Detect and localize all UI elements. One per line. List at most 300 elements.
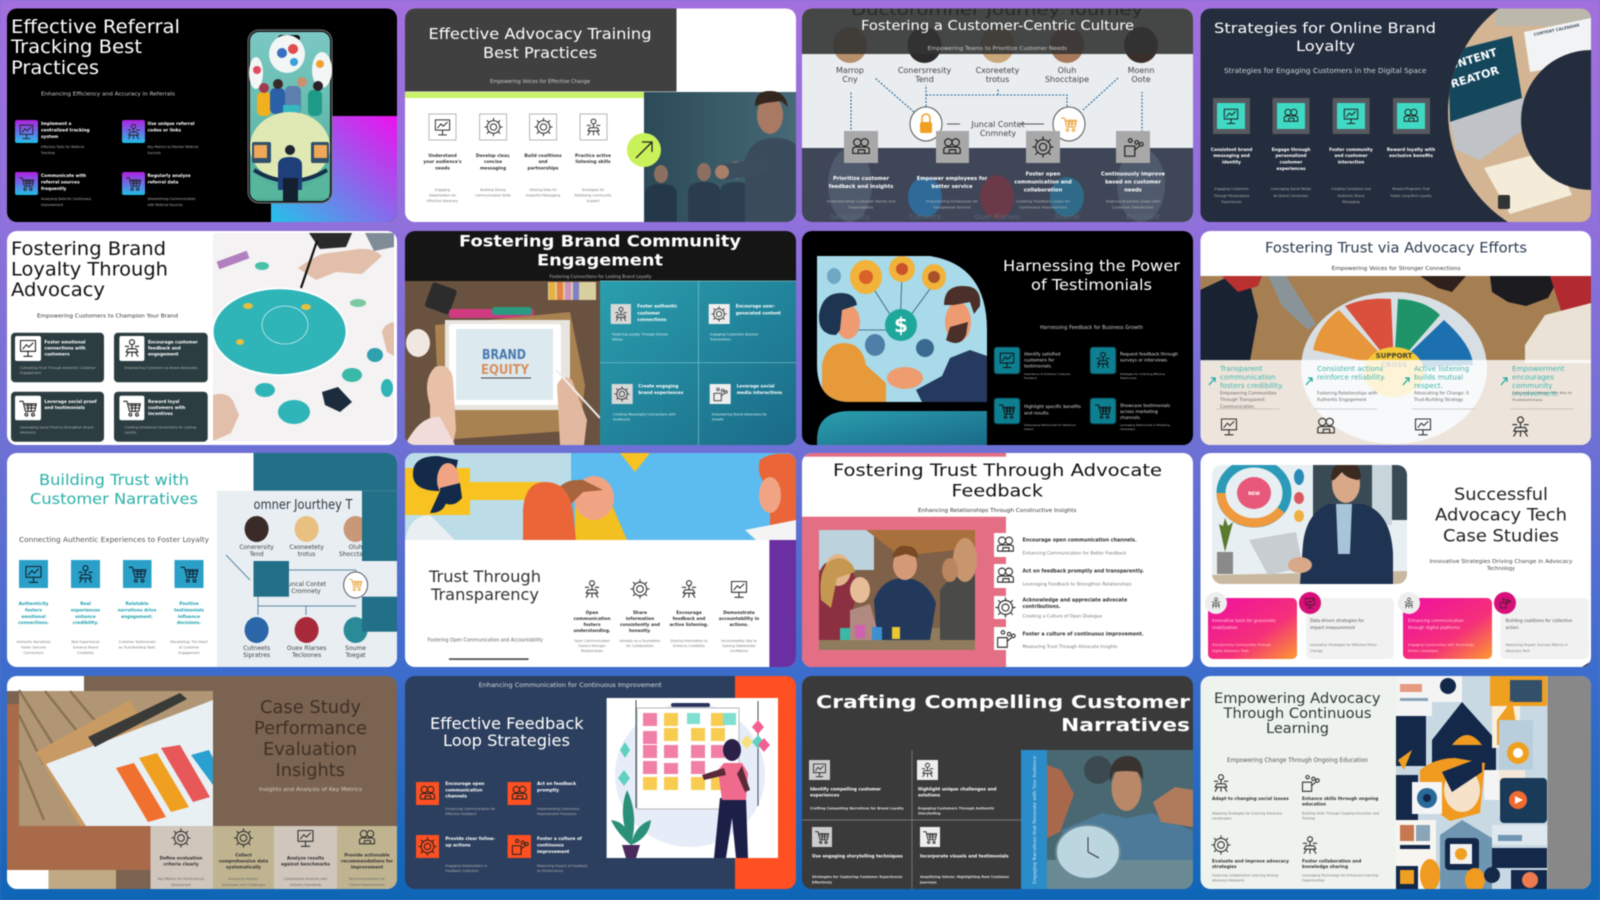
subtitle: Enhancing Efficiency and Accuracy in Referrals xyxy=(41,92,175,98)
orange side bar xyxy=(735,676,796,889)
header band xyxy=(405,8,676,92)
item: showcase testimonials: channels. xyxy=(1120,415,1141,421)
item: act promptly xyxy=(508,781,580,816)
gradient corner block xyxy=(271,116,397,222)
card: impact measurement xyxy=(1299,592,1394,659)
item: understand audience: your audience's xyxy=(423,159,462,165)
item: community interaction: Authentic Brand xyxy=(1338,194,1364,198)
panel: Case Study Performance Evaluation Insights xyxy=(7,676,397,889)
item: consistent messaging: Consistent brand xyxy=(1211,147,1252,153)
card: feedback and engagement: engagement xyxy=(148,352,178,358)
item: customer experiences: Crafting Compelling Narratives for Brand Loyalty xyxy=(810,806,905,810)
item: open channels xyxy=(416,781,496,816)
item: referral codes xyxy=(122,120,199,155)
item: empowerment: Trustworthiness xyxy=(1511,397,1543,402)
item: open channels: communication xyxy=(445,788,482,794)
item: specific benefits: Showcasing Testimonials for Maximum xyxy=(1024,423,1076,427)
panel: Successful Advocacy Tech Case Studies xyxy=(1200,453,1591,667)
item: analyze referral data: referral data xyxy=(148,180,178,186)
subtitle: Technology xyxy=(1486,566,1515,572)
item: understand audience xyxy=(423,114,462,203)
item: reward loyalty: Reward loyalty with xyxy=(1387,147,1435,153)
item: ongoing education: Building Skills Through Ongoing Education and xyxy=(1302,812,1379,816)
diagram fragment background: Cromnety xyxy=(291,588,321,595)
card: emotional connections: connections with xyxy=(44,346,86,352)
item: social issues xyxy=(1212,775,1289,820)
item: act promptly: Act on feedback xyxy=(537,781,576,787)
card: grassroots tools: mobilization xyxy=(1212,625,1238,630)
white translucent overlay xyxy=(1200,360,1591,445)
item: consistent messaging: identity xyxy=(1222,160,1241,166)
underline accent xyxy=(449,658,529,660)
item: culture of improvement: improvement xyxy=(537,849,569,855)
item: centralized tracking: centralized tracking xyxy=(41,128,90,134)
item: active listening: listening skills xyxy=(575,159,611,165)
item: evaluation criteria: Assessment xyxy=(171,883,192,887)
item: social media: Leverage social xyxy=(737,384,775,390)
item: recommendations: Provide actionable xyxy=(344,852,390,858)
item: showcase testimonials xyxy=(1090,398,1171,431)
item: referral codes: Key Metrics to Monitor Referral xyxy=(148,145,199,149)
item: empower employees: Exceptional Service xyxy=(933,204,971,210)
card: digital platforms: Enhancing communication xyxy=(1408,618,1464,623)
title xyxy=(254,697,367,781)
title xyxy=(1003,257,1181,294)
item: comprehensive data: comprehensive data xyxy=(219,858,268,864)
item: accountability xyxy=(719,582,759,653)
panel: Effective Feedback Loop Strategies xyxy=(405,676,796,889)
lock and cart nodes xyxy=(910,107,1085,141)
item: identify customers: Feedback xyxy=(1024,376,1037,380)
item: authentic connections: Values xyxy=(612,338,623,342)
diagram fragment background xyxy=(217,491,397,667)
item: referral codes: codes or links xyxy=(148,128,181,134)
item: active listening: respect. xyxy=(1414,381,1443,390)
item: active listening xyxy=(575,114,611,203)
item: reward loyalty: Reward Programs That xyxy=(1392,187,1430,191)
item: real experiences: Real xyxy=(80,601,91,607)
item: social issues: Adapt to changing social issues xyxy=(1212,796,1289,802)
item: social issues: Landscapes xyxy=(1212,816,1232,820)
item: empowerment: involvement. xyxy=(1512,389,1559,398)
item: clear messaging xyxy=(475,114,511,198)
card: grassroots tools: Digital Advocacy Tools xyxy=(1212,649,1249,653)
item: open communication xyxy=(1014,131,1072,210)
item: brand experiences xyxy=(612,384,684,422)
title: Fostering Brand Community xyxy=(459,232,742,251)
card: grassroots tools: Innovative tools for grassroots xyxy=(1212,618,1276,623)
item: reward loyalty: Foster Long-Term Loyalty xyxy=(1390,194,1432,198)
diagram fragment background: Tend xyxy=(249,551,264,558)
item: active listening: Active listening xyxy=(1414,364,1469,373)
photo: content creator desk: ONTENT xyxy=(1447,46,1499,73)
item: consistent messaging: Experiences xyxy=(1221,200,1242,204)
item: empowerment: community xyxy=(1512,381,1553,390)
item: unique challenges: Highlight unique challenges and xyxy=(918,786,996,792)
item: clear messaging: Develop clear, xyxy=(476,153,510,159)
item: centralized tracking xyxy=(15,120,90,155)
item: empowerment: encourages xyxy=(1512,373,1554,382)
photo: team collaborating around table xyxy=(819,530,977,650)
photo: clipboard with bar chart xyxy=(19,690,213,826)
item: encourage feedback xyxy=(670,581,709,648)
title: Practices xyxy=(11,57,99,79)
item: active listening: Advocating for Change: A xyxy=(1414,390,1469,396)
item: knowledge sharing: Opportunities xyxy=(1302,878,1325,882)
title: Fostering Trust Through Advocate xyxy=(833,461,1162,481)
purple side bar xyxy=(769,540,796,667)
item: authentic connections: Fostering Loyalty Through Shared xyxy=(612,332,668,336)
faint lower labels: Ouer Rlarses xyxy=(975,213,1020,221)
item: visuals and testimonials xyxy=(919,827,1010,884)
title: Successful xyxy=(1454,485,1548,504)
item: open channels: Encourage open communication channels. xyxy=(1022,538,1137,544)
item: accountability: Gaining Stakeholder xyxy=(722,644,756,648)
item: evaluate strategies: Advocacy Networks xyxy=(1212,878,1245,882)
card: reward loyal customers: incentives xyxy=(148,411,173,417)
card: reward loyal customers: Creating Emotional Connections for Lasting xyxy=(124,426,196,430)
item: share information: information xyxy=(626,616,654,622)
subtitle: Empowering Voices for Stronger Connections xyxy=(1332,266,1461,272)
item: clear messaging: messaging xyxy=(480,166,506,172)
item: transparent communication xyxy=(1209,364,1284,435)
card: emotional connections: Engagement xyxy=(20,371,42,375)
item: comprehensive data: systematically xyxy=(226,864,261,870)
item: appreciate contributions: Creating a Culture of Open Dialogue xyxy=(1022,614,1103,620)
item: knowledge sharing xyxy=(1302,837,1378,882)
faint lower labels: Cutneets xyxy=(909,213,941,221)
diagram fragment background: omner Jourthey T xyxy=(254,498,353,513)
item: comprehensive data: Successes and Challenges xyxy=(222,883,266,887)
card: feedback and engagement: Empowering Customers as Brand Advocates xyxy=(124,366,198,370)
item: knowledge sharing: Leveraging Technology for Enhanced Learning xyxy=(1302,874,1378,878)
card: digital platforms: through digital platforms xyxy=(1408,625,1460,630)
panel: Fostering Trust via Advocacy Efforts xyxy=(1200,231,1591,445)
item: share information: for Collaboration xyxy=(626,644,654,648)
item: culture of improvement: on Performance xyxy=(537,869,563,873)
item: transparent communication: Through Transparent xyxy=(1219,397,1265,403)
title xyxy=(429,26,651,59)
subtitle: Enhancing Communication for Continuous Improvement xyxy=(479,682,662,689)
item: understand audience: Engaging xyxy=(435,188,450,192)
panel: Harnessing the Power of Testimonials xyxy=(802,231,1193,445)
card: collective action: Building coalitions for collective xyxy=(1506,618,1573,623)
item: clear messaging: Communication Skills xyxy=(475,194,511,198)
item: active listening xyxy=(1403,364,1475,435)
diagram fragment background: Shocctaipe xyxy=(339,551,372,558)
item: open channels: Enhancing Communication for Better Feedback xyxy=(1022,550,1127,556)
item: real experiences: Credibility xyxy=(77,651,94,655)
item: open communication: Continuous Improvement xyxy=(1019,204,1068,210)
item: transparent communication: Transparent xyxy=(1219,364,1263,373)
item: personalized experiences: Leveraging Social Media xyxy=(1271,187,1311,191)
item: community interaction: Foster community xyxy=(1329,147,1373,153)
item: coalitions: partnerships xyxy=(528,166,559,172)
item: open communication: collaboration xyxy=(1024,188,1063,194)
card: social proof: Leveraging Social Proof to Strengthen Brand xyxy=(20,426,93,430)
faint background heading: Ductoromner Journey Tourney xyxy=(851,1,1143,19)
item: real experiences: enhance xyxy=(75,614,96,620)
item: share information: Share xyxy=(633,610,647,616)
item: understand audience: needs xyxy=(435,166,450,172)
item: user-generated content: Encourage user- xyxy=(736,304,775,310)
item: authentic connections: Foster authentic xyxy=(637,304,678,310)
item: share information: honestly. xyxy=(629,628,651,634)
item: community interaction: Creating Consistent and xyxy=(1331,187,1371,191)
item: communicate with sources xyxy=(15,172,92,207)
panel: Crafting Compelling Customer Narratives xyxy=(802,676,1193,889)
item: encourage feedback: active listening. xyxy=(670,622,709,628)
item: continuous improvement: needs xyxy=(1124,188,1142,194)
item: customer experiences xyxy=(809,760,905,810)
item: authenticity: Authenticity xyxy=(19,601,49,607)
item: accountability: Accountability: Key to xyxy=(721,639,757,643)
item: active listening: Support xyxy=(586,199,600,203)
title xyxy=(428,567,541,604)
item: share information: consistently and xyxy=(620,622,660,628)
item: positive testimonials: decisions. xyxy=(177,620,201,626)
title: Strategies for Online Brand xyxy=(1214,21,1436,37)
title: Fostering Trust via Advocacy Efforts xyxy=(1265,241,1527,257)
panel: Trust Through Transparency xyxy=(405,453,796,667)
card: collective action: action xyxy=(1506,625,1519,630)
photo: strategy map on paper xyxy=(213,233,394,441)
title: Feedback xyxy=(952,482,1043,502)
teal rounded lower block xyxy=(817,411,987,445)
item: evaluate strategies: strategies xyxy=(1212,864,1237,870)
subtitle: Empowering Voices for Effective Change xyxy=(490,79,590,85)
item: open communication: understanding. xyxy=(573,628,611,634)
item: real experiences: experiences xyxy=(71,608,101,614)
item: relatable narratives: engagement. xyxy=(121,614,153,620)
item: community interaction: and customer xyxy=(1334,153,1368,159)
item: act promptly: Improvement Processes xyxy=(537,812,577,816)
item: identify customers xyxy=(994,347,1071,380)
item: accountability: Demonstrate xyxy=(723,610,755,616)
background journey diagram: trotus xyxy=(986,75,1009,84)
title: Engagement xyxy=(537,251,663,270)
item: open channels: Enhancing Communication for xyxy=(445,807,496,811)
item: authenticity xyxy=(17,560,51,655)
card: emotional connections: customers xyxy=(44,352,70,358)
item: encourage feedback: Enhance Credibility xyxy=(673,644,705,648)
item: positive testimonials xyxy=(170,560,208,655)
item: positive testimonials: Engagement xyxy=(178,651,200,655)
title: Building Trust with xyxy=(39,471,189,489)
item: accountability: accountability in xyxy=(719,616,759,622)
item: empower employees: Empower employees for xyxy=(917,176,988,182)
subtitle: Empowering Customers to Champion Your Brand xyxy=(37,314,178,320)
card: collective action: Advocacy Tech xyxy=(1506,649,1530,653)
title: of Testimonials xyxy=(1031,276,1152,294)
item: empower employees: better service xyxy=(932,184,973,190)
item: follow-up actions: Feedback Collection xyxy=(445,869,478,873)
title xyxy=(30,471,198,508)
item: open channels: channels xyxy=(445,794,467,800)
title xyxy=(459,232,742,270)
diagram fragment background: Tecloones xyxy=(291,652,321,659)
item: positive testimonials: Storytelling: The Heart xyxy=(170,640,208,644)
item: community interaction: interaction xyxy=(1338,160,1364,166)
card: reward loyal customers: customers with xyxy=(148,405,185,411)
title: Best Practices xyxy=(483,44,597,62)
item: personalized experiences: personalized xyxy=(1275,153,1307,159)
item: active listening: Practice active xyxy=(575,153,611,159)
card: impact measurement: Innovative Strategies for Effective Policy xyxy=(1310,643,1377,647)
item: community interaction xyxy=(1329,98,1373,204)
item: open channels xyxy=(994,533,1137,557)
item: transparent communication: communication xyxy=(1220,373,1276,382)
subtitle: Harnessing Feedback for Business Growth xyxy=(1040,325,1143,331)
item: coalitions: Utilizing Data for xyxy=(529,188,558,192)
item: understand audience: Effective Advocacy xyxy=(427,199,458,203)
title: Loyalty Through xyxy=(11,258,168,280)
item: brand experiences: brand experiences xyxy=(638,390,684,396)
item: evaluate strategies: Evaluate and improve advocacy xyxy=(1212,858,1289,864)
card: emotional connections: Foster emotional xyxy=(44,340,86,346)
item: customer feedback: Expectations xyxy=(849,204,873,210)
background journey diagram: Cny xyxy=(842,75,858,84)
item: centralized tracking: Implement a xyxy=(41,121,72,127)
item: identify customers: customers for xyxy=(1024,358,1055,364)
diagram fragment background: Juncal Contet xyxy=(285,581,327,588)
title: Customer Narratives xyxy=(30,490,198,508)
subtitle: Empowering Change Through Ongoing Education xyxy=(1227,757,1368,764)
background journey diagram: Cnmnety xyxy=(980,129,1016,138)
item: culture of improvement xyxy=(508,835,588,873)
item: social media: Growth xyxy=(712,418,724,422)
background journey diagram: Cxoreetety xyxy=(976,66,1020,75)
card: social proof: Advocacy xyxy=(20,430,36,434)
title xyxy=(1435,485,1567,546)
photo: content creator desk xyxy=(1447,8,1591,222)
item: evaluate strategies xyxy=(1212,836,1289,882)
card: social proof xyxy=(11,392,104,442)
diagram fragment background: Ouex Rlarses xyxy=(287,645,326,652)
item: communicate with sources: Analyzing Data for Continuous xyxy=(41,197,92,201)
item: social media: Empowering Brand Advocates for xyxy=(712,412,768,416)
item: accountability: actions. xyxy=(729,622,749,628)
diagram fragment background: Cutneets xyxy=(243,645,270,652)
item: request feedback xyxy=(1090,347,1178,380)
item: accountability: Confidence xyxy=(730,649,748,653)
item: active listening: builds mutual xyxy=(1414,373,1463,382)
title: Evaluation xyxy=(263,739,357,760)
item: share information xyxy=(620,580,660,648)
gray side block xyxy=(1548,676,1591,889)
title xyxy=(816,692,1190,736)
item: open communication: Foster open xyxy=(1026,172,1061,178)
item: benchmark results: against benchmarks xyxy=(281,862,330,868)
card: social proof: and testimonials xyxy=(44,405,85,411)
item: storytelling techniques: Effectively xyxy=(812,880,833,884)
item: consistent actions: reinforce reliability. xyxy=(1317,373,1386,382)
item: request feedback: Strategies for Collecting Effective xyxy=(1120,372,1165,376)
item: positive testimonials: Positive xyxy=(179,601,199,607)
card: grassroots tools: Transforming Communities Through xyxy=(1211,643,1271,647)
subtitle: Empowering Teams to Prioritize Customer Needs xyxy=(928,46,1067,52)
item: relatable narratives: as Trust-Building Tools xyxy=(119,646,155,650)
item: open communication: Open Communication xyxy=(574,639,610,643)
item: reward loyalty: exclusive benefits xyxy=(1389,153,1433,159)
item: authentic connections: customer xyxy=(637,310,661,316)
item: personalized experiences: customer xyxy=(1280,160,1303,166)
item: open communication: communication and xyxy=(1014,180,1072,186)
item: recommendations: Recommendations for xyxy=(349,877,386,881)
card: collective action xyxy=(1494,592,1589,659)
title: Fostering Brand xyxy=(11,238,166,260)
item: centralized tracking: system xyxy=(41,134,59,140)
item: communicate with sources: Communicate with xyxy=(41,173,86,179)
photo: confident leader pointing xyxy=(644,91,796,222)
arrow badge xyxy=(627,133,661,167)
item: empower employees: Empowering Employees for xyxy=(926,198,978,204)
item: showcase testimonials: Leveraging Testimonials in Marketing xyxy=(1120,423,1170,427)
card: feedback and engagement: Encourage customer xyxy=(148,340,199,346)
item: empowerment: Listening to Voices: The Key to xyxy=(1512,390,1572,395)
item: culture of improvement: Measuring Impact of Feedback xyxy=(537,864,588,868)
item: unique challenges: Engaging Customers Through Authentic xyxy=(918,806,994,810)
illustration: geometric media collage xyxy=(1396,676,1548,892)
background journey diagram: Marrop xyxy=(836,66,864,75)
item: referral codes: Use unique referral xyxy=(148,121,195,127)
vertical blue band: Engaging Narratives that Resonate with Your Audience xyxy=(1032,756,1038,884)
photo: content creator desk: CONTENT CALENDAR xyxy=(1533,22,1580,37)
card: reward loyal customers: Loyalty xyxy=(124,430,136,434)
faint lower labels xyxy=(830,214,1159,220)
item: communicate with sources: Improvement xyxy=(41,203,64,207)
item: open channels: Effective Feedback xyxy=(445,812,477,816)
item: continuous improvement culture xyxy=(994,627,1144,650)
item: real experiences xyxy=(71,560,101,655)
item: open communication: fosters xyxy=(583,622,601,628)
item: community interaction: Messaging xyxy=(1342,200,1360,204)
faint lower diagram figures xyxy=(828,148,1165,222)
card: digital platforms xyxy=(1398,592,1492,659)
item: customer experiences: experiences xyxy=(810,792,840,798)
panel: Effective Advocacy Training Best Practices xyxy=(405,8,796,222)
card: impact measurement: Data-driven strategies for xyxy=(1310,618,1364,623)
item: continuous improvement culture: Measuring Trust Through Advocate Insights xyxy=(1022,644,1118,650)
item: open communication: Open xyxy=(586,610,598,616)
item: brand experiences: Audiences xyxy=(613,418,630,422)
item: ongoing education: Enhance skills through ongoing xyxy=(1302,796,1378,802)
item: relatable narratives: Relatable xyxy=(125,601,149,607)
item: real experiences: Enhance Brand xyxy=(73,646,98,650)
item: understand audience: Stakeholders for xyxy=(429,194,457,198)
item: continuous improvement: Customer Satisfaction xyxy=(1112,204,1155,210)
item: open communication: communication xyxy=(573,616,611,622)
item: open communication: Creating Feedback Loops for xyxy=(1016,198,1071,204)
corner mark xyxy=(1582,662,1590,667)
background journey diagram: Oote xyxy=(1131,75,1151,84)
item: act on feedback xyxy=(994,564,1144,588)
item: follow-up actions: up actions xyxy=(445,843,471,849)
item: user-generated content: Transactions xyxy=(709,338,731,342)
faint lower labels: Sourne xyxy=(1055,213,1079,221)
item: knowledge sharing: Foster collaboration and xyxy=(1302,858,1361,864)
item: open communication xyxy=(573,581,611,653)
item: continuous improvement: Aligning Business Goals with xyxy=(1106,198,1161,204)
item: customer feedback xyxy=(826,131,896,210)
card: emotional connections: Cultivating Trust Through Authentic Customer xyxy=(20,366,96,370)
item: positive testimonials: influence xyxy=(178,614,200,620)
title: Trust Through xyxy=(428,567,541,586)
background journey diagram: Conersrresity xyxy=(898,66,951,75)
item: unique challenges: Storytelling xyxy=(918,812,941,816)
item: authenticity: Foster Genuine xyxy=(21,646,46,650)
item: benchmark results: Analyze results xyxy=(287,856,325,862)
